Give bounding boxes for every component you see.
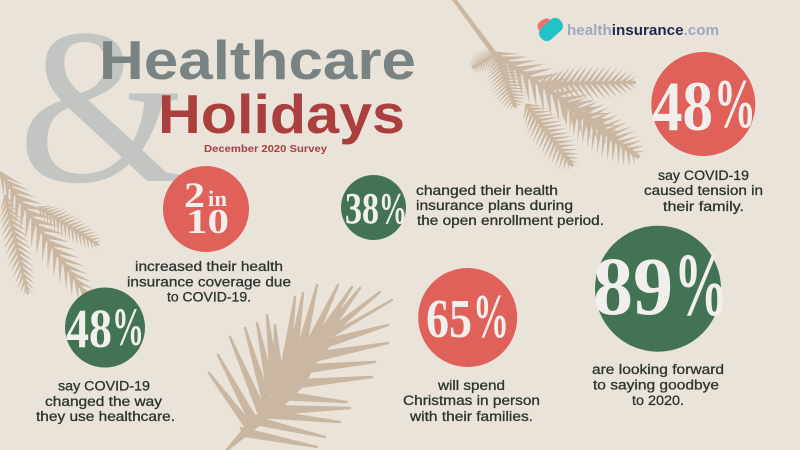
- caption: [403, 378, 540, 424]
- number: [66, 297, 144, 359]
- palm leaf: [209, 285, 392, 450]
- title: Holidays: Holidays: [158, 83, 405, 145]
- caption: to 2020.: [632, 393, 684, 408]
- stat: 2 in 10: [127, 166, 291, 304]
- number: [426, 283, 509, 351]
- circle: [163, 166, 249, 252]
- caption: say COVID-19: [58, 378, 150, 394]
- icon: logo heart: [535, 15, 566, 44]
- pine branch: left: [0, 162, 107, 310]
- caption: to saying goodbye: [593, 378, 719, 392]
- circle: [65, 288, 145, 368]
- caption: with their families.: [409, 409, 533, 424]
- stat: 38%: [341, 175, 604, 240]
- number: %: [674, 236, 728, 335]
- stat: 89%: [592, 226, 728, 408]
- number: 38: [345, 184, 379, 233]
- caption: [416, 183, 604, 228]
- number: %: [379, 184, 407, 233]
- number: 2 in 10: [184, 175, 229, 241]
- caption: [592, 362, 724, 408]
- number: %: [112, 297, 144, 357]
- title: Healthcare: Healthcare: [99, 29, 416, 91]
- number: 48: [66, 298, 112, 359]
- number: %: [714, 66, 756, 143]
- caption: insurance plans during: [416, 198, 573, 213]
- caption: [644, 168, 763, 214]
- caption: changed the way: [45, 394, 162, 409]
- number: 48: [652, 68, 713, 146]
- circle: [595, 226, 721, 352]
- number: 2 in 10: in: [208, 186, 227, 211]
- stat: 65%: [403, 268, 540, 424]
- caption: their family.: [663, 199, 744, 214]
- stat: 48% family tension: [644, 52, 763, 214]
- caption: to COVID-19.: [167, 290, 251, 304]
- caption: are looking forward: [592, 362, 724, 377]
- caption: [127, 259, 291, 304]
- number: 89: [593, 240, 673, 332]
- number: %: [473, 283, 509, 351]
- circle: [341, 175, 406, 240]
- caption: the open enrollment period.: [417, 213, 604, 228]
- caption: Christmas in person: [403, 393, 540, 408]
- logo: [535, 15, 719, 44]
- logo wordmark: healthinsurance.com: [567, 22, 719, 39]
- pine branch: top right: [452, 0, 654, 178]
- caption: will spend: [437, 378, 505, 393]
- caption: say COVID-19: [658, 168, 749, 183]
- subtitle: December 2020 Survey: [204, 143, 327, 155]
- number: [652, 66, 756, 146]
- circle: [418, 268, 517, 367]
- caption: caused tension in: [644, 183, 763, 198]
- stat: 48% healthcare use: [36, 288, 175, 424]
- circle: [651, 52, 755, 156]
- number: 2 in 10: 2: [184, 175, 205, 215]
- caption: they use healthcare.: [36, 409, 175, 424]
- caption: insurance coverage due: [127, 274, 291, 290]
- caption: changed their health: [416, 183, 558, 198]
- number: 65: [426, 288, 472, 349]
- caption: increased their health: [135, 259, 283, 274]
- caption: [36, 378, 175, 424]
- number: [593, 236, 728, 335]
- number: 2 in 10: 10: [186, 202, 229, 241]
